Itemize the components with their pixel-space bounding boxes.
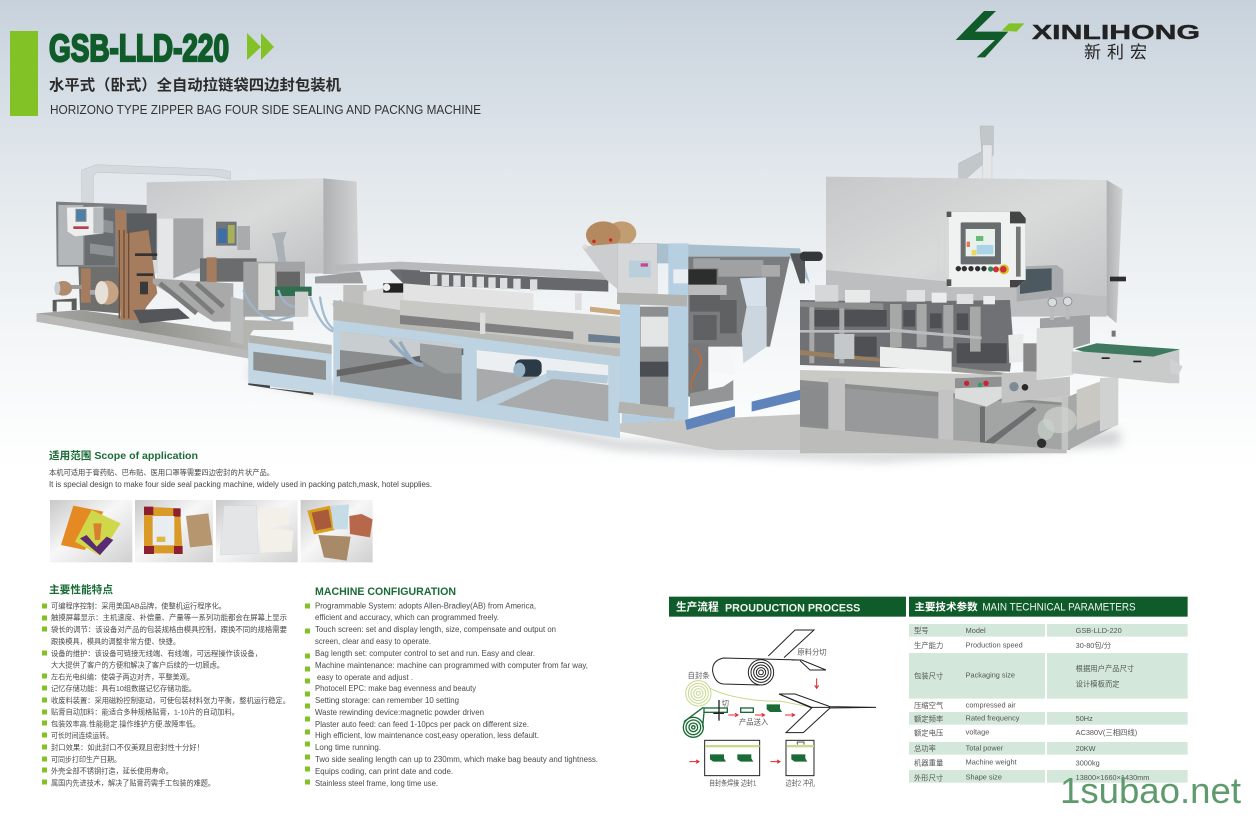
diagram: product pieces (767, 704, 782, 712)
parameter row shading (909, 624, 1188, 783)
floor shadow (250, 365, 1120, 462)
diagram: sealed bag step 1 (705, 740, 760, 776)
parameter table text: voltage (966, 727, 989, 736)
configuration list: Two side sealing length can up to 230mm, which make bag beauty and tightness. (315, 755, 598, 764)
process header bar: 生产流程 (676, 601, 719, 614)
diagram labels (688, 648, 827, 787)
features heading: 主要性能特点 (49, 583, 114, 596)
parameter table text: Rated frequency (966, 714, 1020, 723)
header title block (10, 28, 481, 117)
configuration heading: MACHINE CONFIGURATION (315, 586, 456, 598)
panel: production process (669, 597, 906, 787)
parameter table text: Production speed (966, 640, 1023, 649)
features list: 袋长的调节：该设备对产品的包装规格由模具控制，跟换不同的规格需要 (51, 625, 287, 634)
configuration list: High efficient, low maintenance cost,easy operation, less default. (315, 731, 539, 740)
configuration list: Programmable System: adopts Allen-Bradley(AB) from America, (315, 602, 536, 610)
green accent bar (10, 31, 38, 116)
parameter table text: 额定电压 (914, 728, 943, 737)
photo: orange and yellow plaster packs (50, 500, 132, 562)
english subtitle: HORIZONO TYPE ZIPPER BAG FOUR SIDE SEALING AND PACKNG MACHINE (50, 102, 481, 117)
section: scope of application (49, 449, 432, 562)
machine illustration (37, 126, 1183, 462)
parameter table text: Shape size (966, 773, 1002, 782)
logo wordmark: XINLIHONG (1032, 22, 1200, 44)
scope english description: It is special design to make four side seal packing machine, widely used in packing patch,mask, hotel supplies. (49, 480, 432, 489)
parameter table text (914, 626, 1149, 783)
diagram labels: 原料分切 (797, 648, 827, 657)
parameter table text: AC380V(三相四线) (1076, 728, 1137, 737)
features list: 封口效果：如此封口不仅美观且密封性十分好！ (51, 743, 204, 752)
parameters header bar: MAIN TECHNICAL PARAMETERS (982, 602, 1136, 614)
features list: 收废料装置：采用磁粉控制驱动，可使包装材料张力平衡，整机运行稳定。 (51, 696, 290, 705)
features list: 左右光电纠编：使袋子两边对齐，平整美观。 (51, 672, 194, 682)
parameter table text: compressed air (966, 700, 1016, 709)
parameters header bar: 主要技术参数 (914, 601, 978, 614)
photo: assorted packs and patches (301, 500, 373, 562)
configuration list: easy to operate and adjust . (317, 673, 413, 682)
parameter table text: 30-80包/分 (1076, 641, 1112, 650)
machine right back panel (826, 126, 1123, 323)
diagram: red flow arrows (689, 678, 819, 763)
parameter table text: 机器重量 (914, 759, 943, 768)
configuration list: Setting storage: can remember 10 setting (315, 696, 459, 705)
features list: 贴膏自动加料：能适合多种规格贴膏，1-10片的自动加料。 (51, 708, 239, 716)
diagram: zipper strip coil (686, 681, 812, 707)
icon: double arrows (247, 33, 274, 60)
configuration list: efficient and accuracy, which can programmed freely. (315, 613, 499, 622)
configuration list: Bag length set: computer control to set and run. Easy and clear. (315, 649, 535, 658)
configuration bullets (305, 604, 310, 784)
parameter table text: Model (966, 626, 986, 635)
scope chinese description: 本机可适用于膏药贴、巴布贴、医用口罩等需要四边密封的片状产品。 (49, 468, 274, 477)
configuration list: Stainless steel frame, long time use. (315, 779, 438, 788)
parameter table text: Machine weight (966, 758, 1017, 767)
parameter table text: 13800×1660×1430mm (1076, 773, 1149, 782)
parameter table text: 50Hz (1076, 714, 1093, 723)
background gradient (0, 0, 1256, 470)
process header bar (669, 597, 906, 617)
parameter table text: 型号 (914, 626, 929, 635)
machine middle section (333, 221, 820, 450)
features list: 包装效率高.性能稳定.操作维护方便.故障率低。 (51, 720, 200, 728)
features list: 跟换模具，模具的调整非常方便、快捷。 (51, 637, 180, 646)
diagram: sealed bag step 2 (786, 740, 814, 776)
configuration list: screen, clear and easy to operate. (315, 637, 431, 646)
features list: 记忆存储功能：具有10组数据记忆存储功能。 (51, 684, 196, 693)
features list: 大大提供了客户的方便和解决了客户后续的一切顾虑。 (51, 660, 224, 670)
diagram labels: 产品送入 (739, 717, 769, 726)
machine right section (790, 212, 1183, 453)
features bullets (42, 604, 47, 784)
parameter table text: 包装尺寸 (914, 671, 943, 680)
parameters header bar (909, 597, 1188, 617)
features list: 属国内先进技术，解决了贴膏药需手工包装的难题。 (51, 778, 215, 788)
panel: technical parameters (909, 597, 1188, 783)
features list: 设备的维护：该设备可链接无线端、有线端，可远程操作该设备， (51, 649, 262, 658)
parameter table text: GSB-LLD-220 (1076, 626, 1122, 635)
model title: GSB-LLD-220 (49, 28, 229, 70)
section: machine configuration (305, 586, 598, 788)
chinese subtitle: 水平式（卧式）全自动拉链袋四边封包装机 (49, 76, 341, 94)
machine left section (37, 165, 420, 395)
configuration list: Photocell EPC: make bag evenness and beauty (315, 684, 476, 693)
features list: 可同步打印生产日期。 (51, 755, 121, 764)
company logo (956, 11, 1200, 62)
features list: 触摸屏幕显示：主机速度、补偿量、产量等一系列功能都会在屏幕上显示 (51, 613, 287, 622)
diagram: material roll and slitting (713, 630, 826, 685)
parameter table text: 根据用户产品尺寸 (1076, 664, 1134, 673)
diagram labels: 切 (722, 699, 729, 708)
section: main features (42, 583, 290, 788)
parameter table text: 生产能力 (914, 641, 943, 650)
configuration list: Plaster auto feed: can feed 1-10pcs per pack on different size. (315, 720, 529, 729)
scope heading: 适用范围 Scope of application (49, 449, 198, 462)
photo: framed pack and brown patch (135, 500, 213, 562)
diagram labels: 自封条 (688, 671, 710, 680)
diagram: product coil and cutter (683, 700, 753, 737)
diagram: forming wedge (779, 694, 876, 733)
parameter table text: 压缩空气 (914, 701, 944, 710)
features list: 外壳全部不锈钢打造，延长使用寿命。 (51, 766, 173, 776)
parameter table text: 20KW (1076, 744, 1096, 753)
features list (51, 602, 290, 788)
watermark: 1subao.net (1060, 770, 1241, 811)
icon: logo mark (956, 11, 1024, 57)
features list: 可编程序控制：采用美国AB品牌，使整机运行程序化。 (51, 602, 226, 610)
process header bar: PROUDUCTION PROCESS (725, 602, 860, 614)
configuration list: Long time running. (315, 743, 381, 752)
parameter table text: 外形尺寸 (914, 774, 943, 783)
configuration list: Waste rewinding device:magnetic powder driven (315, 708, 484, 717)
photo: white mask pouch and sheets (216, 500, 298, 562)
parameter table text: 3000kg (1076, 758, 1100, 767)
parameter table text: 额定频率 (914, 714, 943, 723)
configuration list: Equips coding, can print date and code. (315, 767, 453, 776)
product photos (50, 500, 373, 562)
configuration list: Touch screen: set and display length, size, compensate and output on (315, 625, 556, 634)
configuration list (315, 602, 598, 788)
logo chinese name: 新利宏 (1084, 43, 1147, 62)
features list: 可长时间连续运转。 (51, 731, 113, 740)
parameter table text: 总功率 (914, 744, 936, 753)
parameter table text: Total power (966, 743, 1004, 752)
diagram labels: 自封条焊接 边封1 (709, 778, 756, 787)
parameter table text: Packaging size (966, 671, 1015, 680)
configuration list: Machine maintenance: machine can programmed with computer from far way, (315, 661, 588, 670)
parameter table text: 设计模板而定 (1076, 680, 1120, 689)
diagram labels: 边封2 冲孔 (786, 778, 816, 787)
